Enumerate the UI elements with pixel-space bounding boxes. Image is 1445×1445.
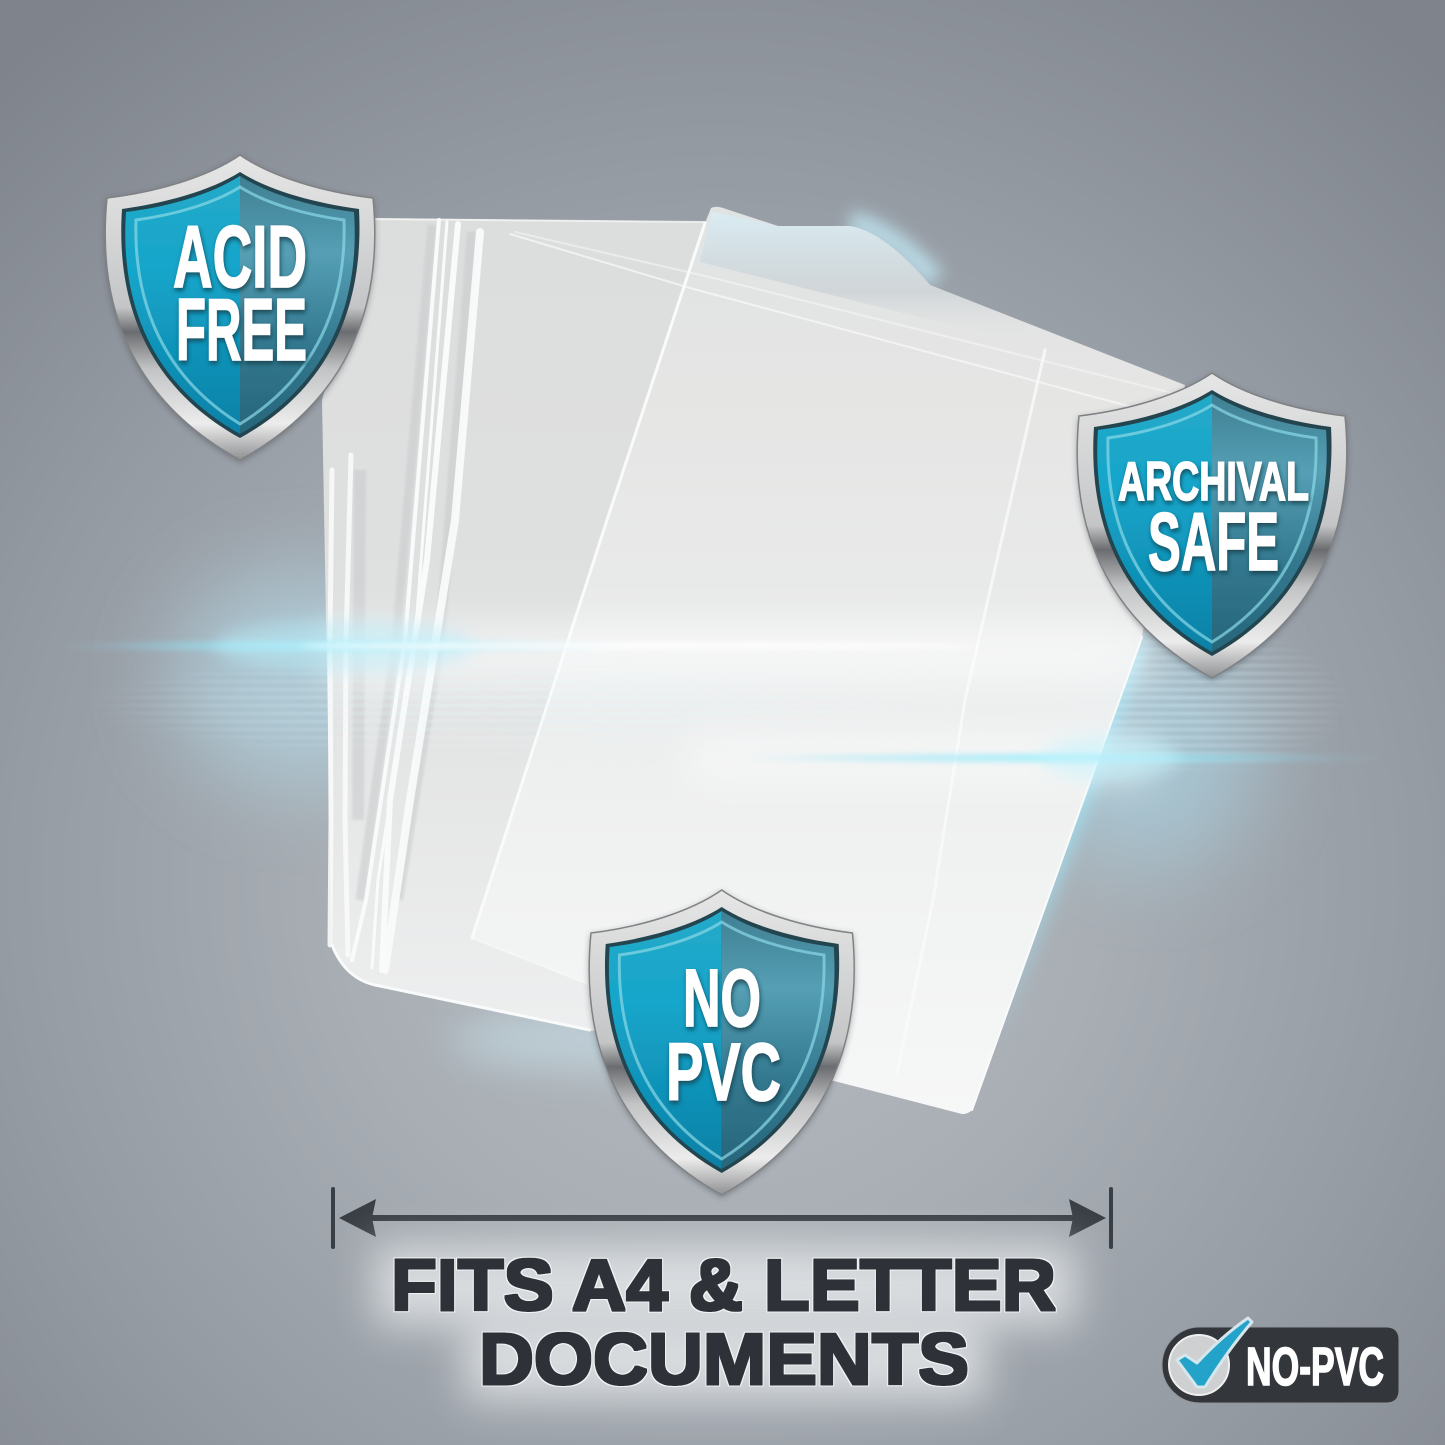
check mark xyxy=(1177,1318,1252,1387)
dimension arrow xyxy=(331,1187,1113,1249)
shield badge: acid free: FREE xyxy=(176,280,307,379)
shield badge: archival safe xyxy=(1077,373,1347,678)
shield badge: acid free xyxy=(105,155,375,460)
document sleeves xyxy=(322,207,1185,1114)
stack shadow gaps xyxy=(358,225,472,900)
shield badge: no pvc xyxy=(589,890,854,1195)
glow: sheet right edge xyxy=(990,640,1140,1050)
sleeve edge lines xyxy=(330,219,1180,1110)
badge body xyxy=(1162,1327,1399,1403)
shield badge: acid free: ACID xyxy=(173,207,307,306)
top translucent band xyxy=(700,212,1030,345)
no-pvc badge xyxy=(1162,1318,1399,1403)
back sleeve stack xyxy=(322,218,838,1082)
heading: FITS A4 & LETTER xyxy=(391,1246,1056,1326)
heading xyxy=(391,1246,1056,1400)
glow behind heading xyxy=(375,1245,1075,1400)
badge circle xyxy=(1169,1335,1229,1395)
shield badge: no pvc: PVC xyxy=(666,1027,781,1118)
shield badge: archival safe: SAFE xyxy=(1148,495,1279,588)
shield badge: archival safe: ARCHIVAL xyxy=(1118,450,1309,512)
shield badge: no pvc: NO xyxy=(683,953,761,1044)
glow: blue light behind sleeves xyxy=(170,222,1260,1070)
light flares xyxy=(55,620,1445,790)
heading: DOCUMENTS xyxy=(479,1320,969,1400)
front sleeve with top tab xyxy=(472,207,1185,1114)
